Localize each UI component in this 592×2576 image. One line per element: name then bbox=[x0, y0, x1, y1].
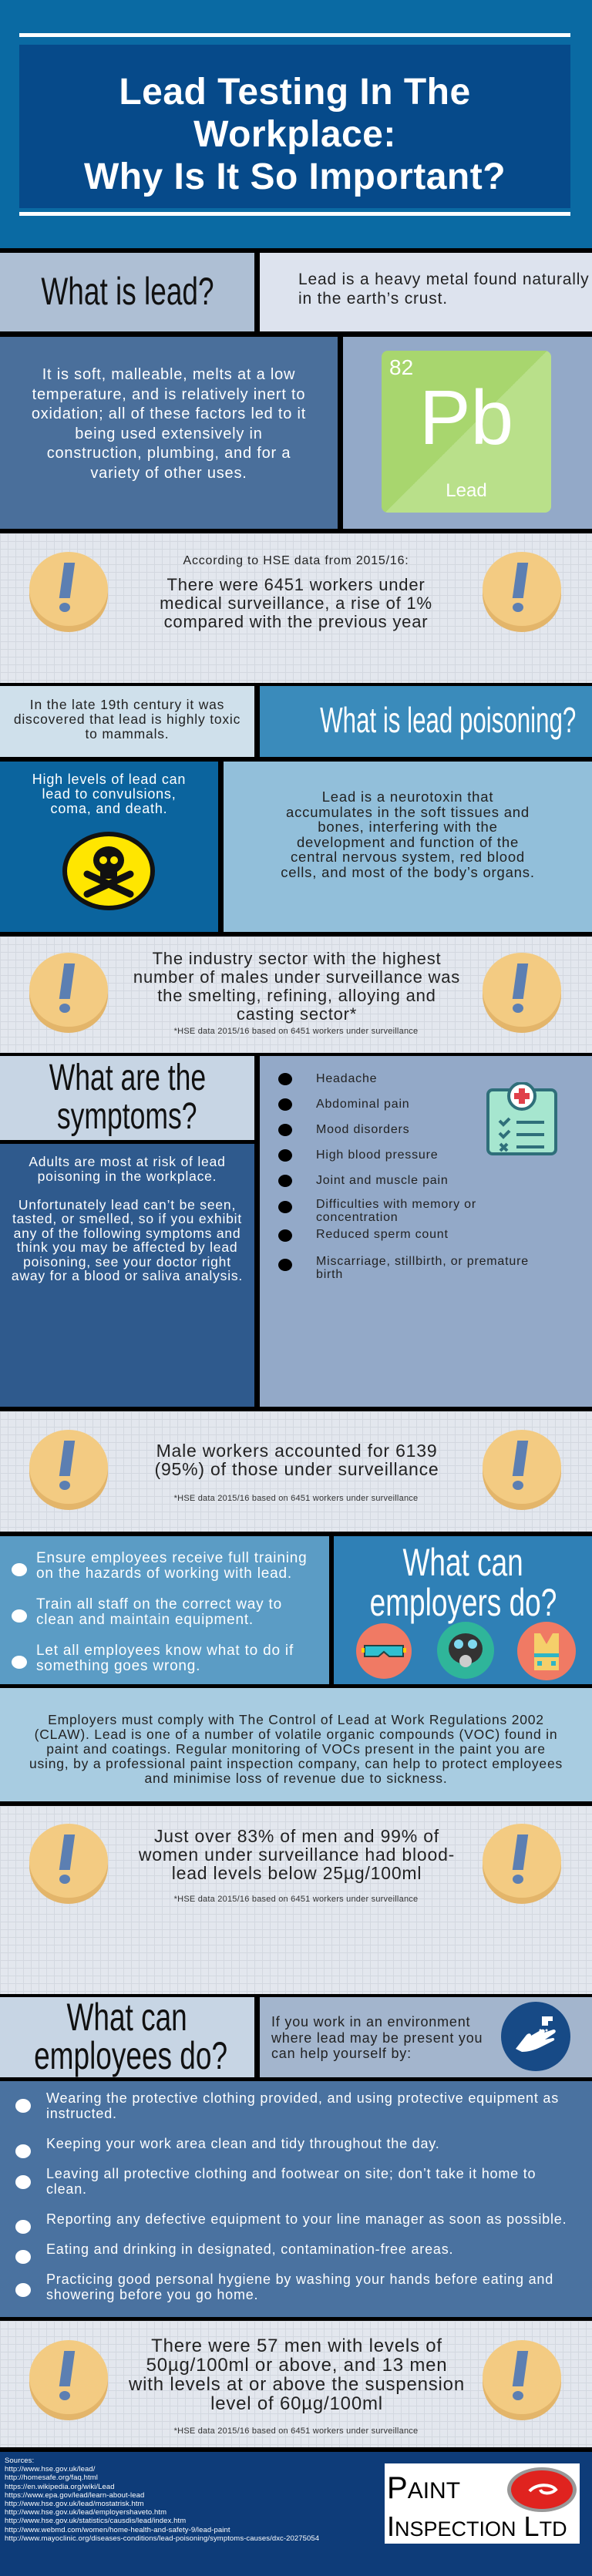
panel: symptom list: Abdominal pain bbox=[316, 1098, 410, 1111]
stat panel 3 bbox=[0, 1411, 592, 1532]
header bbox=[0, 0, 592, 248]
icon: exclamation 5 right bbox=[483, 2340, 561, 2420]
panel: high levels bbox=[0, 762, 218, 932]
icon: exclamation 4 right bbox=[483, 1824, 561, 1904]
stat panel 5 bbox=[0, 2321, 592, 2447]
icon: goggles bbox=[356, 1623, 412, 1679]
sources list: http://www.hse.gov.uk/lead/employershaveto.htm bbox=[5, 2508, 166, 2517]
stat panel 3: Male workers accounted for 6139 (95%) of those under surveillance bbox=[154, 1441, 439, 1479]
icon: exclamation 2 left bbox=[29, 953, 108, 1033]
panel: symptom list: Reduced sperm count bbox=[316, 1228, 449, 1241]
panel: employee actions list: Practicing good personal hygiene by washing your hands before eating and showering before you go home. bbox=[46, 2272, 553, 2302]
text: adults at risk: Adults are most at risk of lead poisoning in the workplace. bbox=[29, 1154, 226, 1184]
panel: employee actions list: Leaving all protective clothing and footwear on site; don’t take it home to clean. bbox=[46, 2166, 536, 2197]
title box: Why Is It So Important? bbox=[84, 156, 506, 197]
sources list: http://www.mayoclinic.org/diseases-conditions/lead-poisoning/symptoms-causes/dxc-20275054 bbox=[5, 2534, 319, 2543]
heading: symptoms bbox=[0, 1056, 254, 1140]
icon: exclamation 2 right bbox=[483, 953, 561, 1033]
panel: high levels: lead to convulsions, bbox=[42, 786, 177, 802]
stat panel 2 bbox=[0, 937, 592, 1053]
title box: Workplace: bbox=[193, 114, 396, 155]
stat panel 4: *HSE data 2015/16 based on 6451 workers under surveillance bbox=[174, 1895, 418, 1904]
heading: symptoms: What are the bbox=[49, 1058, 206, 1098]
sources list: http://homesafe.org/faq.html bbox=[5, 2473, 98, 2482]
text: neurotoxin: Lead is a neurotoxin that accumulates in the soft tissues and bones, interfering with the development and function of the central nervous system, red blood cells, and most of the body’s organs. bbox=[281, 789, 535, 880]
panel: employer actions: Ensure employees receive full training on the hazards of working with lead. bbox=[36, 1550, 307, 1582]
heading: what is lead poisoning bbox=[260, 686, 592, 757]
heading: what can employers do: What can bbox=[402, 1541, 523, 1584]
panel: employer actions bbox=[0, 1536, 329, 1684]
icon: skull bbox=[62, 832, 155, 910]
sources list: http://www.hse.gov.uk/lead/ bbox=[5, 2465, 96, 2473]
text: adults at risk: Unfortunately lead can’t be seen, tasted, or smelled, so if you exhibit any of the following symptoms and think you may be affected by lead poisoning, see your doctor right away for a blood or saliva analysis. bbox=[12, 1196, 243, 1283]
stat panel 4: Just over 83% of men and 99% of women under surveillance had blood-lead levels below 25µg/100ml bbox=[139, 1826, 455, 1883]
panel: symptom list: High blood pressure bbox=[316, 1148, 438, 1162]
logo bbox=[385, 2463, 580, 2544]
panel: employee actions list: Reporting any defective equipment to your line manager as soon as possible. bbox=[46, 2211, 567, 2227]
heading: what is lead poisoning: What is lead poisoning? bbox=[320, 700, 576, 740]
sources list: http://www.hse.gov.uk/statistics/causdis/lead/index.htm bbox=[5, 2517, 186, 2525]
stat panel 5: There were 57 men with levels of 50µg/100ml or above, and 13 men with levels at or above the suspension level of 60µg/100ml bbox=[129, 2336, 465, 2414]
icon: periodic tile: Pb bbox=[419, 375, 513, 461]
panel: symptom list: Mood disorders bbox=[316, 1123, 409, 1136]
text: neurotoxin bbox=[224, 762, 592, 932]
panel: what is lead heading bbox=[0, 253, 254, 331]
stat panel 1: According to HSE data from 2015/16: bbox=[183, 554, 409, 567]
text: lead definition: Lead is a heavy metal found naturally in the earth’s crust. bbox=[298, 271, 589, 308]
panel: what is lead heading: What is lead? bbox=[41, 270, 214, 313]
panel: employer actions: Let all employees know what to do if something goes wrong. bbox=[36, 1643, 294, 1674]
icon: exclamation 3 right bbox=[483, 1430, 561, 1510]
icon: vest bbox=[517, 1622, 576, 1680]
sources list: https://en.wikipedia.org/wiki/Lead bbox=[5, 2483, 115, 2491]
icon: gas mask bbox=[437, 1622, 494, 1679]
text: CLAW regulations: Employers must comply with The Control of Lead at Work Regulations 2002 (CLAW). Lead is one of a number of volatile organic compounds (VOC) found in paint and coatings. Regular monitoring of VOCs present in the paint you are using, by a professional paint inspection company, can help to protect employees and minimise loss of revenue due to sickness. bbox=[29, 1712, 563, 1786]
panel: symptom list: Headache bbox=[316, 1072, 377, 1085]
icon: exclamation 1 right bbox=[483, 552, 561, 632]
panel: employees intro: If you work in an environment where lead may be present you can help yourself by: bbox=[271, 2014, 483, 2061]
logo: PAINT bbox=[387, 2471, 460, 2505]
panel: employee actions list: Keeping your work area clean and tidy throughout the day. bbox=[46, 2136, 440, 2151]
text: adults at risk bbox=[0, 1144, 254, 1407]
icon: periodic tile: Lead bbox=[446, 480, 487, 501]
panel: Pb tile bbox=[343, 337, 592, 529]
stat panel 2: *HSE data 2015/16 based on 6451 workers under surveillance bbox=[174, 1027, 418, 1036]
stat panel 3: *HSE data 2015/16 based on 6451 workers under surveillance bbox=[174, 1494, 418, 1503]
text: CLAW regulations bbox=[0, 1688, 592, 1801]
icon: clipboard bbox=[486, 1082, 557, 1155]
panel: high levels: High levels of lead can bbox=[32, 772, 186, 787]
panel: employee actions list: Wearing the protective clothing provided, and using protective equipment as instructed. bbox=[46, 2090, 559, 2121]
icon: exclamation 1 left bbox=[29, 552, 108, 632]
panel: properties text bbox=[0, 337, 338, 529]
title box: Lead Testing In The bbox=[119, 72, 471, 113]
panel: high levels: coma, and death. bbox=[51, 801, 167, 816]
text: 19th century bbox=[0, 686, 254, 757]
panel: employee actions list: Eating and drinking in designated, contamination-free areas. bbox=[46, 2241, 453, 2257]
heading: symptoms: symptoms? bbox=[57, 1096, 197, 1137]
panel: symptom list bbox=[260, 1056, 592, 1407]
stat panel 5: *HSE data 2015/16 based on 6451 workers under surveillance bbox=[174, 2426, 418, 2436]
text: 19th century: In the late 19th century it was discovered that lead is highly toxic to mammals. bbox=[14, 697, 240, 742]
icon: hand washing bbox=[501, 2002, 570, 2071]
icon: periodic tile: 82 bbox=[389, 355, 413, 379]
heading: what can employers do: employers do? bbox=[369, 1581, 557, 1624]
heading: what can employers do bbox=[334, 1536, 592, 1684]
sources list: Sources: bbox=[5, 2457, 34, 2465]
sources list: http://www.webmd.com/women/home-health-and-safety-9/lead-paint bbox=[5, 2526, 230, 2534]
panel: employee actions list bbox=[0, 2081, 592, 2317]
panel: symptom list: Miscarriage, stillbirth, or premature birth bbox=[316, 1255, 529, 1281]
panel: symptom list: Difficulties with memory or concentration bbox=[316, 1198, 476, 1224]
stat panel 1 bbox=[0, 533, 592, 683]
sources list bbox=[5, 2457, 319, 2543]
icon: exclamation 3 left bbox=[29, 1430, 108, 1510]
logo: INSPECTION LTD bbox=[387, 2510, 567, 2542]
icon: exclamation 5 left bbox=[29, 2340, 108, 2420]
sources list: http://www.hse.gov.uk/lead/mostatrisk.htm bbox=[5, 2500, 144, 2508]
panel: properties text: It is soft, malleable, melts at a low temperature, and is relatively inert to oxidation; all of these factors led to it being used extensively in construction, plumbing, and for a variety of other uses. bbox=[32, 366, 306, 481]
heading: what can employees do bbox=[0, 1997, 254, 2077]
stat panel 4 bbox=[0, 1806, 592, 1994]
icon: exclamation 4 left bbox=[29, 1824, 108, 1904]
stat panel 2: The industry sector with the highest number of males under surveillance was the smelting, refining, alloying and casting sector* bbox=[133, 949, 460, 1024]
text: lead definition bbox=[260, 253, 592, 331]
panel: symptom list: Joint and muscle pain bbox=[316, 1174, 449, 1187]
heading: what can employees do: employees do? bbox=[34, 2034, 227, 2077]
panel: employer actions: Train all staff on the correct way to clean and maintain equipment. bbox=[36, 1596, 282, 1628]
sources list: https://www.epa.gov/lead/learn-about-lead bbox=[5, 2491, 144, 2500]
heading: what can employees do: What can bbox=[67, 1996, 187, 2039]
icon: periodic tile bbox=[382, 351, 551, 513]
panel: employees intro bbox=[260, 1997, 592, 2077]
footer bbox=[0, 2452, 592, 2576]
title box bbox=[19, 33, 570, 216]
stat panel 1: There were 6451 workers under medical surveillance, a rise of 1% compared with the previous year bbox=[160, 575, 432, 631]
